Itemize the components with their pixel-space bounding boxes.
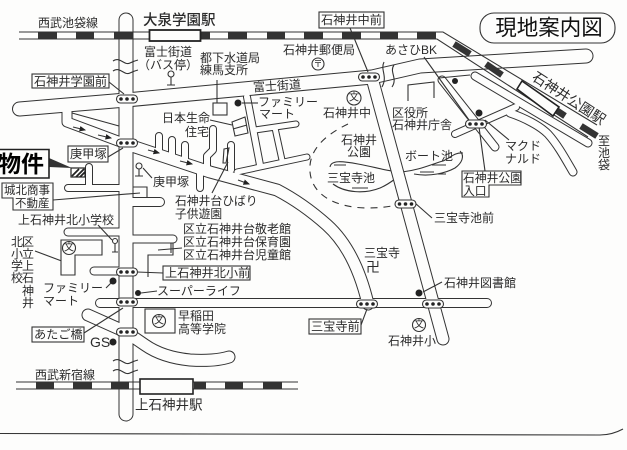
station: 大泉学園駅: 大泉学園駅 bbox=[143, 12, 216, 29]
label: 庚甲塚 box bbox=[68, 146, 123, 162]
label: マクドナルド: ナルド bbox=[505, 152, 541, 166]
school building: 文 bbox=[64, 240, 74, 254]
label: あたご橋 box bbox=[32, 308, 123, 342]
label: 庚甲塚 bus stop bbox=[135, 163, 189, 189]
label: あたご橋 box: あたご橋 bbox=[34, 326, 83, 342]
label: 石神井小: 文 bbox=[414, 318, 424, 330]
label: 区役所石神井庁舎: 区役所 bbox=[392, 105, 428, 120]
label: 石神井学園前: 石神井学園前 bbox=[34, 74, 107, 88]
label: 上石神井北小学校: 上石神井北小学校 bbox=[18, 212, 114, 227]
road network bbox=[20, 20, 588, 414]
label: 区立 facilities: 区立石神井台児童館 bbox=[183, 247, 291, 262]
label: スーパーライフ: スーパーライフ bbox=[157, 284, 241, 298]
label: GS: GS bbox=[90, 334, 110, 350]
label: 三宝寺 bbox=[364, 246, 400, 275]
station: 上石神井駅 bbox=[135, 379, 203, 412]
label: 日本生命住宅: 日本生命 bbox=[162, 110, 210, 125]
label: 石神井中前 box bbox=[319, 12, 384, 72]
one-way arrows bbox=[73, 127, 249, 184]
bus stop: 富士街道: 富士街道 bbox=[144, 45, 192, 59]
label: 北区立上石神井小学校 vertical bbox=[11, 235, 67, 310]
label: 石神井図書館 bbox=[416, 275, 516, 296]
road break marks bbox=[113, 60, 394, 374]
label: 日本生命住宅: 住宅 bbox=[185, 125, 209, 139]
label: 庚甲塚 box: 庚甲塚 bbox=[70, 147, 107, 161]
traffic signals bbox=[116, 73, 486, 336]
label: 石神井郵便局 bbox=[283, 42, 355, 70]
park boundary dashed bbox=[310, 124, 397, 208]
label: ファミリーマート south: マート bbox=[43, 294, 79, 308]
label: ファミリーマート north: マート bbox=[259, 107, 295, 121]
label: 北区立上石神井小学校 vertical: 区 bbox=[22, 235, 34, 249]
rail: Seibu Ikebukuro line bbox=[19, 32, 597, 137]
label: 区立 facilities: 区立石神井台保育園 bbox=[183, 234, 291, 249]
label: 石神井公園: 公園 bbox=[347, 145, 371, 159]
label: 北区立上石神井小学校 vertical: 校 bbox=[11, 271, 23, 285]
label: 三宝寺: 三宝寺 bbox=[364, 246, 400, 260]
title: 現地案内図 bbox=[495, 16, 603, 40]
road label: 富士街道: 富士街道 bbox=[253, 77, 301, 95]
label: ボート池: ボート池 bbox=[405, 149, 453, 163]
label: 三宝寺池前: 三宝寺池前 bbox=[434, 210, 494, 225]
label: 石神井小: 石神井小 bbox=[388, 333, 436, 348]
label: 北区立上石神井小学校 vertical: 石 bbox=[22, 271, 34, 285]
label: 三宝寺池前 bbox=[415, 203, 494, 225]
label: 上石神井北小前 box: 上石神井北小前 bbox=[165, 265, 250, 280]
label: 北区立上石神井小学校 vertical: 小 bbox=[11, 247, 23, 261]
station: 上石神井駅: 上石神井駅 bbox=[135, 398, 203, 412]
label: 早稲田高等学院: 早稲田 bbox=[178, 309, 214, 323]
label: ファミリーマート north bbox=[234, 95, 318, 121]
label: 三宝寺前 box bbox=[309, 309, 367, 334]
school building bbox=[61, 240, 102, 275]
label: 北区立上石神井小学校 vertical: 北 bbox=[11, 235, 23, 249]
pond: Sanpoji-ike and boat pond bbox=[330, 151, 463, 192]
label: 区立 facilities: 区立石神井台敬老館 bbox=[183, 221, 291, 236]
label: 三宝寺池: 三宝寺池 bbox=[327, 171, 375, 185]
label: 三宝寺: 卍 bbox=[366, 259, 380, 275]
label: 都下水道局練馬支所: 練馬支所 bbox=[200, 63, 248, 77]
label: ファミリーマート south bbox=[43, 278, 116, 308]
label: 区立 facilities bbox=[158, 221, 291, 262]
label: 北区立上石神井小学校 vertical: 立 bbox=[22, 247, 34, 261]
label: 石神井台ひばり子供遊園 bbox=[175, 162, 258, 221]
label: ファミリーマート south: ファミリー bbox=[43, 281, 103, 295]
station: 石神井公園駅: 石神井公園駅 bbox=[529, 68, 609, 128]
label: 石神井公園入口 box: 入口 bbox=[463, 184, 487, 198]
label: 都下水道局練馬支所: 都下水道局 bbox=[200, 51, 260, 65]
label: 北区立上石神井小学校 vertical: 学 bbox=[11, 258, 23, 273]
title bbox=[480, 13, 615, 43]
label: 至池袋: 至 bbox=[598, 134, 610, 148]
label: 石神井公園: 石神井 bbox=[341, 132, 377, 147]
label: 石神井図書館: 石神井図書館 bbox=[444, 275, 516, 290]
label: 石神井郵便局: 〒 bbox=[313, 59, 323, 69]
label: 至池袋: 池 bbox=[598, 146, 610, 160]
label: マクドナルド: マクド bbox=[505, 139, 541, 153]
card bottom edge bbox=[0, 429, 623, 435]
label: マクドナルド bbox=[452, 78, 541, 166]
label: 石神井中前 box: 石神井中前 bbox=[321, 12, 382, 27]
label: 石神井中: 石神井中 bbox=[323, 105, 371, 120]
label: 石神井郵便局: 石神井郵便局 bbox=[283, 42, 355, 57]
station: 大泉学園駅 bbox=[143, 12, 216, 41]
label: 石神井中 bbox=[323, 90, 371, 120]
bus stop: 富士街道 bbox=[138, 45, 198, 85]
label: 早稲田高等学院 bbox=[145, 309, 226, 336]
label: 庚甲塚 bus stop: 庚甲塚 bbox=[153, 175, 189, 189]
label: あさひBK bbox=[385, 43, 469, 120]
label: 都下水道局練馬支所 bbox=[200, 51, 260, 115]
label: ファミリーマート north: ファミリー bbox=[258, 95, 318, 109]
label: 早稲田高等学院: 高等学院 bbox=[178, 321, 226, 336]
label: 石神井中: 文 bbox=[349, 90, 359, 104]
label: 城北商事不動産 bbox=[2, 183, 140, 210]
rail: Seibu Shinjuku line bbox=[16, 382, 298, 389]
label: 石神井台ひばり子供遊園: 石神井台ひばり bbox=[175, 194, 258, 208]
label: 北区立上石神井小学校 vertical: 井 bbox=[22, 296, 34, 310]
label: 石神井公園入口 box: 石神井公園 bbox=[463, 171, 522, 185]
label: 北区立上石神井小学校 vertical: 上 bbox=[22, 259, 34, 273]
label: 北区立上石神井小学校 vertical: 神 bbox=[22, 283, 34, 298]
label: 石神井台ひばり子供遊園: 子供遊園 bbox=[175, 207, 222, 221]
bus stop: 富士街道: （バス停） bbox=[138, 58, 198, 72]
line label: 西武新宿線: 西武新宿線 bbox=[35, 367, 95, 382]
label: 三宝寺前 box: 三宝寺前 bbox=[311, 318, 360, 334]
label: 日本生命住宅 bbox=[162, 110, 248, 139]
label: あさひBK: あさひBK bbox=[385, 43, 437, 57]
label: 石神井公園 bbox=[341, 132, 377, 159]
line label: 西武池袋線: 西武池袋線 bbox=[38, 15, 98, 30]
label: 至池袋 bbox=[598, 134, 610, 172]
label: 区役所石神井庁舎: 石神井庁舎 bbox=[392, 117, 452, 132]
label: 上石神井北小学校 bbox=[18, 212, 118, 252]
label: 至池袋: 袋 bbox=[598, 158, 610, 172]
property marker 物件 bbox=[0, 150, 85, 178]
label: 早稲田高等学院: 文 bbox=[154, 314, 164, 326]
label: 石神井学園前 bbox=[32, 74, 124, 94]
label: 区役所石神井庁舎 bbox=[392, 82, 452, 132]
label: 城北商事不動産: 城北商事 bbox=[4, 184, 50, 197]
label: 城北商事不動産: 不動産 bbox=[15, 196, 50, 210]
label: 石神井公園入口 box bbox=[462, 127, 522, 198]
label: 石神井小 bbox=[388, 318, 436, 348]
